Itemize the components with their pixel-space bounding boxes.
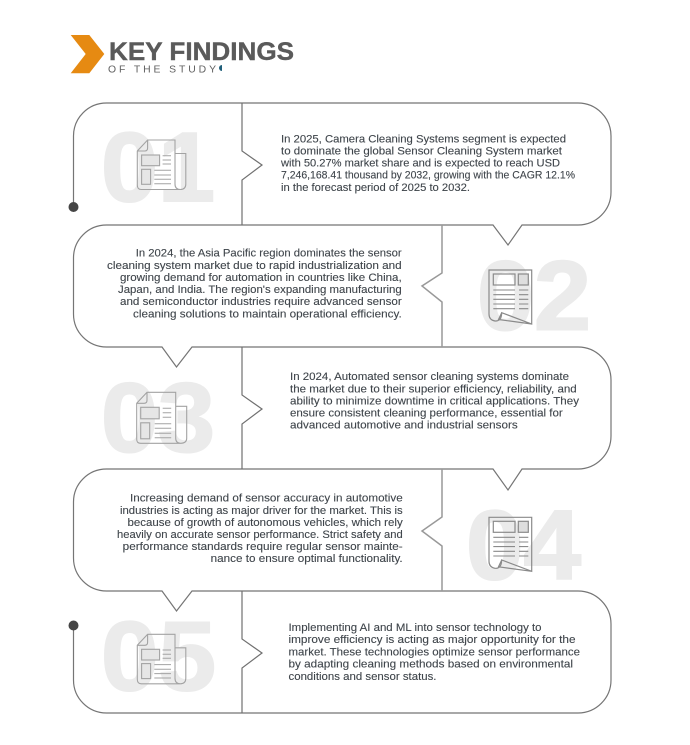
text 01: with 50.27% market share and is expected to reach USD <box>280 158 560 170</box>
text 05: improve efficiency is acting as major opportunity for the <box>288 634 576 646</box>
text 01: in the forecast period of 2025 to 2032. <box>281 182 470 194</box>
text 01 <box>280 133 575 194</box>
panel: finding 02 <box>107 225 591 350</box>
icon: newspaper 02 <box>489 270 532 324</box>
divider with notch 02 <box>422 225 442 347</box>
icon: newspaper 01 <box>137 140 186 190</box>
text 03: advanced automotive and industrial sensors <box>290 420 518 432</box>
text 01: to dominate the global Sensor Cleaning System market <box>281 145 563 157</box>
text 01: 7,246,168.41 thousand by 2032, growing with the CAGR 12.1% <box>281 170 575 182</box>
divider with notch 04 <box>422 469 442 591</box>
text 02: growing demand for automation in countries like China, <box>120 272 402 284</box>
divider with notch 01 <box>242 103 262 225</box>
subheading: of the study: OF THE STUDY <box>108 64 216 75</box>
text 02: In 2024, the Asia Pacific region dominates the sensor <box>136 248 402 260</box>
text 04: nance to ensure optimal functionality. <box>211 553 403 565</box>
end dot <box>68 620 78 630</box>
icon: orange chevron <box>71 35 104 73</box>
text 05: conditions and sensor status. <box>288 671 436 683</box>
text 03: ensure consistent cleaning performance, essential for <box>290 408 563 420</box>
text 01: In 2025, Camera Cleaning Systems segment is expected <box>281 133 566 145</box>
serpentine connector outline <box>74 103 611 713</box>
panel: finding 01 <box>101 103 575 225</box>
icon: blue half dot <box>219 65 222 71</box>
text 02 <box>107 248 402 320</box>
title <box>71 35 294 75</box>
text 03: In 2024, Automated sensor cleaning systems dominate <box>290 371 569 383</box>
text 02: cleaning solutions to maintain operational efficiency. <box>133 308 402 320</box>
divider with notch 03 <box>242 347 262 469</box>
text 05: by adapting cleaning methods based on environmental <box>288 659 573 671</box>
text 05: Implementing AI and ML into sensor technology to <box>288 622 542 634</box>
divider with notch 05 <box>242 591 262 713</box>
text 03: ability to minimize downtime in critical applications. They <box>290 395 579 407</box>
text 05 <box>288 622 580 683</box>
number 02: 02 <box>477 240 591 350</box>
number 01: 01 <box>101 112 215 222</box>
icon: newspaper 04 <box>489 517 532 571</box>
text 04 <box>117 493 403 565</box>
text 04: because of growth of autonomous vehicles, which rely <box>128 517 403 529</box>
text 04: heavily on accurate sensor performance. Strict safety and <box>117 529 403 541</box>
panel: finding 03 <box>101 347 579 472</box>
start dot <box>68 202 78 212</box>
text 05: market. These technologies optimize sensor performance <box>288 646 580 658</box>
text 04: performance standards require regular sensor mainte- <box>123 541 403 553</box>
text 04: Increasing demand of sensor accuracy in automotive <box>130 493 403 505</box>
panel: finding 05 <box>101 591 580 713</box>
icon: newspaper 05 <box>137 634 186 684</box>
text 02: Japan, and India. The region's expanding manufacturing <box>118 284 402 296</box>
text 02: and semiconductor industries require advanced sensor <box>120 296 402 308</box>
heading: key findings: KEY FINDINGS <box>109 38 294 66</box>
text 03: the market due to their superior efficiency, reliability, and <box>290 383 577 395</box>
number 03: 03 <box>101 362 215 472</box>
number 05: 05 <box>101 601 216 711</box>
text 04: industries is acting as major driver for the market. This is <box>120 505 403 517</box>
text 03 <box>290 371 579 432</box>
panel: finding 04 <box>117 469 581 600</box>
icon: newspaper 03 <box>137 392 187 443</box>
text 02: cleaning system market due to rapid industrialization and <box>107 260 402 272</box>
number 04: 04 <box>466 490 581 600</box>
